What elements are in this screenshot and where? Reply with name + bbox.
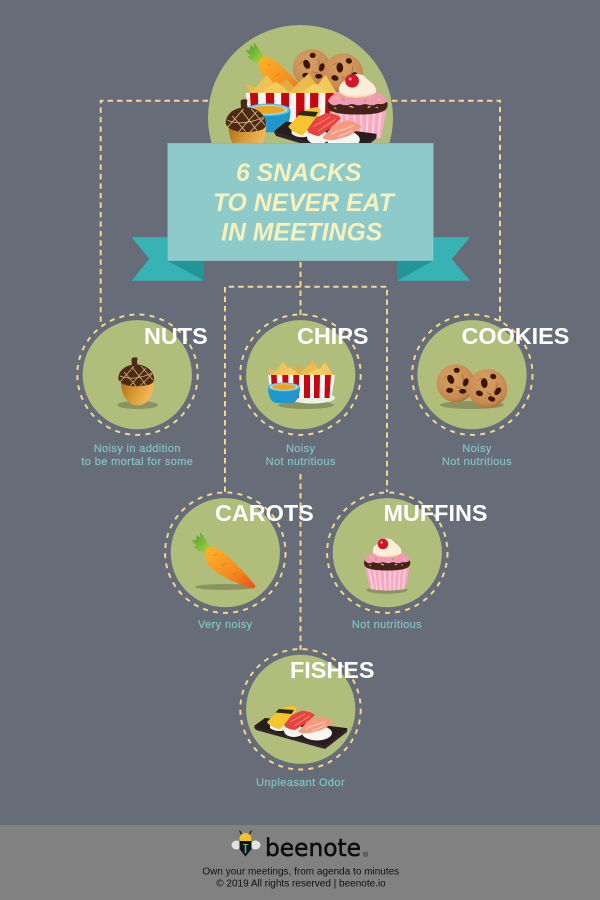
icon: cookies xyxy=(437,364,513,414)
banner panel xyxy=(168,143,433,261)
label: carrots: CAROTS xyxy=(215,500,314,526)
panel: chips xyxy=(240,314,368,468)
caption: carrots: Very noisy xyxy=(198,619,253,631)
logo registered mark: ® xyxy=(363,851,369,859)
caption: muffins: Not nutritious xyxy=(352,619,422,631)
label: cookies: COOKIES xyxy=(462,323,569,349)
ribbon fold right xyxy=(397,261,433,281)
panel: cookies xyxy=(412,314,569,468)
caption: chips xyxy=(266,443,336,468)
icon: sushi xyxy=(254,706,347,749)
panel: carrots xyxy=(165,492,314,631)
label: chips: CHIPS xyxy=(297,323,368,349)
dashed connector lines xyxy=(101,101,500,650)
icon: acorn xyxy=(118,357,154,406)
title text: TO NEVER EAT xyxy=(213,190,396,217)
label: nuts: NUTS xyxy=(144,323,208,349)
label: fishes: FISHES xyxy=(290,657,374,683)
caption: cookies: Not nutritious xyxy=(442,456,512,468)
footer text: Own your meetings, from agenda to minutes xyxy=(202,866,399,878)
title text: 6 SNACKS xyxy=(236,160,362,187)
footer xyxy=(0,825,600,900)
caption: fishes: Unpleasant Odor xyxy=(256,777,345,789)
panel: muffins xyxy=(327,492,487,631)
caption: nuts xyxy=(81,443,193,468)
title text xyxy=(213,160,396,247)
hero snack illustration xyxy=(208,25,393,210)
footer text xyxy=(202,866,399,890)
ribbon tail right xyxy=(397,237,470,281)
panel: nuts xyxy=(77,314,208,468)
panel: fishes xyxy=(240,649,374,789)
icon: bee logo xyxy=(232,830,260,856)
ribbon tail left xyxy=(132,237,204,281)
title banner xyxy=(132,143,470,281)
logo wordmark: beenote xyxy=(265,834,361,862)
caption: chips: Not nutritious xyxy=(266,456,336,468)
footer text: © 2019 All rights reserved | beenote.io xyxy=(216,878,386,890)
title text: IN MEETINGS xyxy=(221,220,383,247)
ribbon fold left xyxy=(168,261,204,281)
label: muffins: MUFFINS xyxy=(384,500,487,526)
icon: carrot xyxy=(192,532,255,588)
caption: cookies xyxy=(442,443,512,468)
caption: nuts: Noisy in addition xyxy=(94,443,181,455)
icon: chips xyxy=(268,361,335,404)
caption: nuts: to be mortal for some xyxy=(81,456,193,468)
caption: cookies: Noisy xyxy=(462,443,492,455)
icon: muffin xyxy=(364,539,410,590)
caption: chips: Noisy xyxy=(286,443,316,455)
